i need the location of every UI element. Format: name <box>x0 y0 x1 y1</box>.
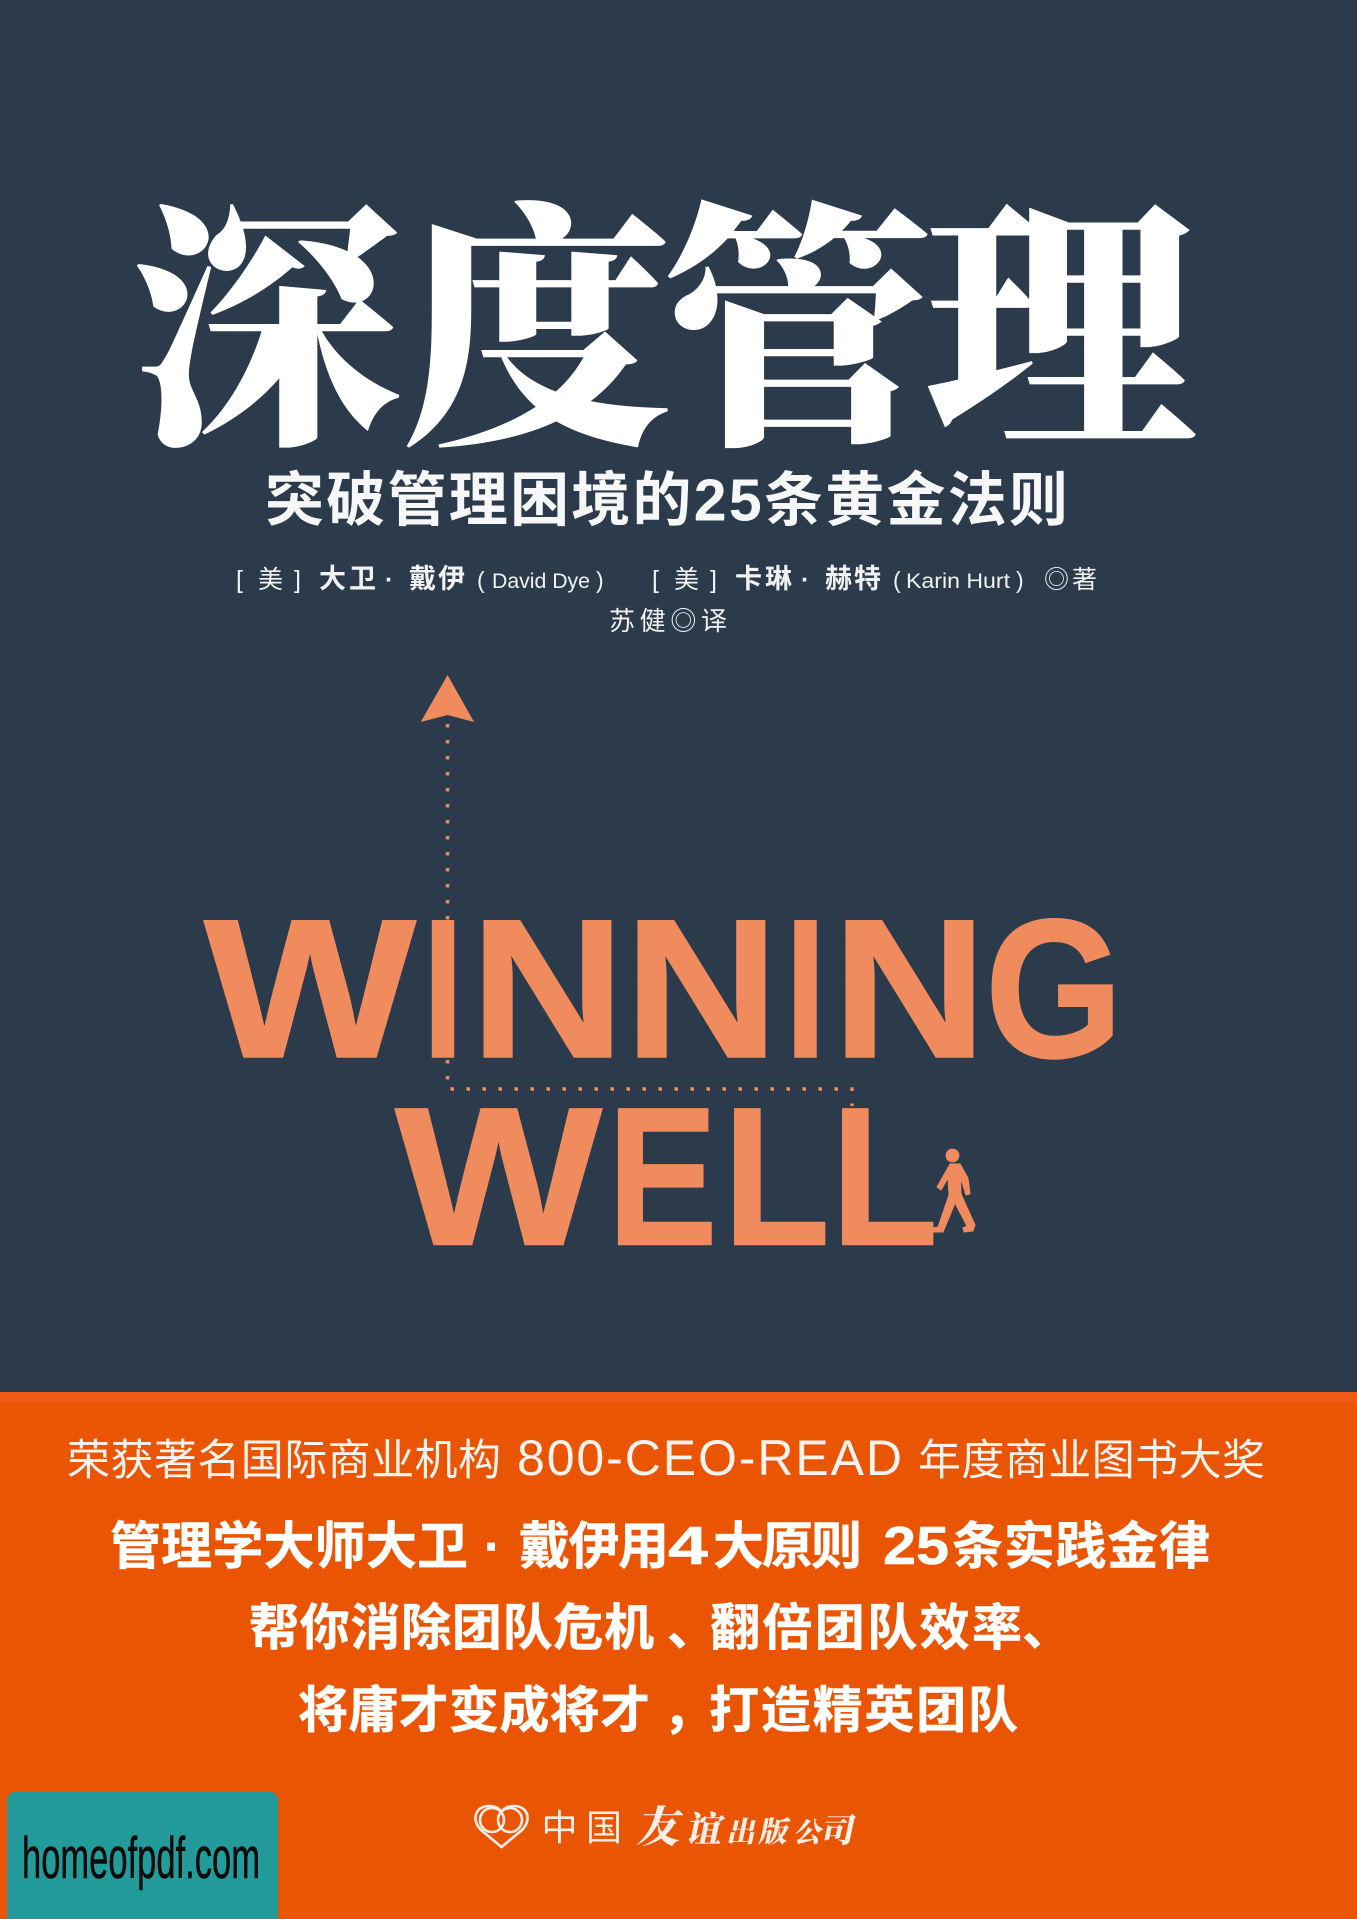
WINNING heading: G <box>985 878 1123 1099</box>
promo line 3: 帮你消除团队危机 <box>249 1600 654 1656</box>
WELL heading: L <box>723 1066 830 1286</box>
publisher name: calligraphy: 司 <box>818 1804 861 1852</box>
WINNING heading: I <box>422 878 464 1099</box>
authors line: ) <box>1016 567 1024 593</box>
publisher name: China: 中国 <box>542 1807 622 1848</box>
WINNING heading: W <box>204 878 416 1099</box>
authors line: 美 <box>258 566 283 594</box>
promo line 2: 大原则 <box>713 1518 862 1575</box>
authors line: [ <box>652 566 659 594</box>
publisher name: calligraphy: 谊 <box>683 1801 730 1853</box>
authors line: [ <box>236 566 243 594</box>
cover background <box>0 0 1357 1392</box>
promo line 2: 条实践金律 <box>952 1518 1210 1575</box>
promo line 1: award: 荣获著名国际商业机构 <box>67 1437 501 1485</box>
authors line: ] <box>294 566 301 594</box>
watermark text: homeofpdf.com <box>22 1826 260 1891</box>
authors line: 戴伊 <box>409 564 465 594</box>
arrow head <box>421 675 474 722</box>
authors line: ( <box>477 567 485 593</box>
WINNING heading: N <box>832 878 987 1099</box>
authors line: ( <box>893 567 901 593</box>
dotted path: from WELL up to the arrow <box>448 724 852 1106</box>
promo line 3: 、 <box>1022 1600 1072 1656</box>
promo line 4: 打造精英团队 <box>709 1682 1018 1738</box>
promo line 2: 25 <box>883 1516 949 1576</box>
authors line: · <box>385 566 393 594</box>
authors line: 赫特 <box>825 564 881 594</box>
authors line: ] <box>710 566 717 594</box>
watermark badge <box>7 1792 278 1919</box>
WINNING heading: N <box>624 878 779 1099</box>
promo line 2: · <box>484 1518 501 1575</box>
authors line: 大卫 <box>319 564 376 594</box>
authors line: · <box>801 566 809 594</box>
promo line 2: 管理学大师大卫 <box>110 1518 468 1575</box>
WELL heading: E <box>608 1066 718 1286</box>
promo line 1: award: 年度商业图书大奖 <box>918 1437 1265 1485</box>
panel: orange promo band <box>0 1392 1357 1919</box>
authors line: David Dye <box>492 570 590 593</box>
promo line 4: ， <box>663 1682 713 1738</box>
promo line 4: 将庸才变成将才 <box>298 1682 650 1738</box>
authors line: ) <box>596 567 604 593</box>
authors line: 著 <box>1072 566 1097 594</box>
icon: walking person <box>933 1149 975 1232</box>
WELL heading: L <box>831 1066 938 1286</box>
subtitle: 突破管理困境的25条黄金法则 <box>265 468 1068 534</box>
WINNING heading: I <box>785 878 826 1099</box>
publisher name: calligraphy: 公 <box>791 1810 828 1851</box>
authors line: 美 <box>674 566 699 594</box>
promo line 2: 4 <box>668 1516 708 1576</box>
authors line: Karin Hurt <box>906 570 1010 593</box>
authors line: ◎ <box>1044 566 1069 594</box>
authors line: 卡琳 <box>735 564 792 594</box>
publisher name: calligraphy: 版 <box>756 1809 794 1851</box>
publisher name: calligraphy: 友 <box>633 1794 690 1855</box>
promo line 3: 、 <box>667 1600 717 1656</box>
promo line 2: 戴伊用 <box>519 1518 669 1575</box>
publisher name: calligraphy: 出 <box>724 1809 762 1851</box>
publisher logo <box>475 1794 863 1855</box>
WINNING heading: N <box>470 878 625 1099</box>
promo line 3: 翻倍团队效率 <box>710 1600 1022 1656</box>
WELL heading: W <box>395 1066 602 1286</box>
icon: publisher heart <box>475 1806 528 1847</box>
translator line: 苏健◎译 <box>609 606 727 636</box>
title: Chinese book title: 深度管理 <box>131 125 1197 498</box>
promo line 1: award: 800-CEO-READ <box>517 1430 902 1486</box>
